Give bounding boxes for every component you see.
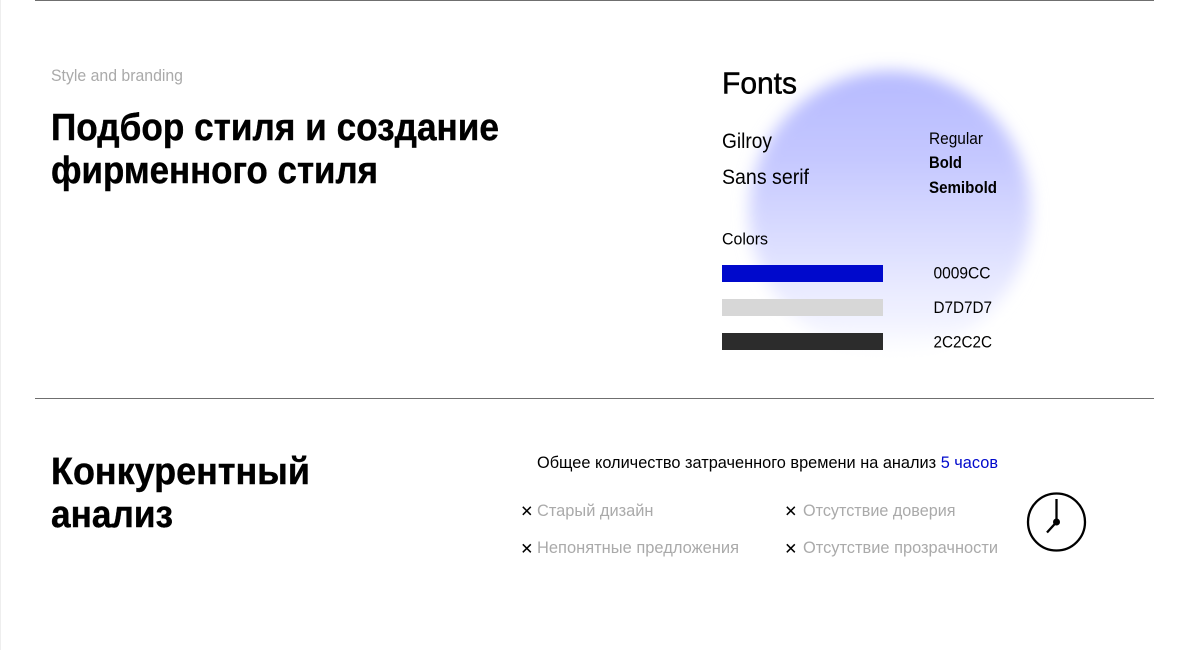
font weights: Semibold [929,178,997,197]
decorative gradient blob [749,71,1031,353]
swatch: 2C2C2C: 2C2C2C [934,332,992,352]
heading: colors: Colors [722,230,768,248]
section: style and branding [51,66,499,192]
heading: style selection: фирменного стиля [51,150,378,192]
swatch: D7D7D7: D7D7D7 [934,298,992,317]
heading: competitor analysis: Конкурентный [51,451,310,493]
section: competitor analysis [51,451,1085,557]
swatch: 0009CC: 0009CC [934,264,990,282]
heading: competitor analysis: анализ [51,494,173,536]
total time text: Общее количество затраченного времени на анализ 5 часов [537,453,998,472]
swatch: 0009CC [722,264,990,282]
heading: fonts: Fonts [722,66,797,100]
font weights [929,129,997,197]
swatch: 2C2C2C [722,332,992,352]
issue: old design: Старый дизайн [537,501,654,520]
heading: style selection: Подбор стиля и создание [51,107,499,149]
panel: fonts and colors [722,66,1031,353]
font weights: Regular [929,129,983,148]
heading: competitor analysis [51,451,310,536]
font names: Sans serif [722,166,809,189]
heading: style selection [51,107,499,192]
issue: lack of transparency: Отсутствие прозрачности [803,538,998,557]
icon: clock [1028,494,1085,550]
eyebrow label: Style and branding [51,66,183,85]
font weights: Bold [929,153,962,172]
font names: Gilroy [722,130,772,153]
swatch: D7D7D7 [722,298,992,317]
issue: unclear offers: Непонятные предложения [537,538,739,557]
issue: lack of trust: Отсутствие доверия [803,501,956,520]
font names [722,130,809,189]
